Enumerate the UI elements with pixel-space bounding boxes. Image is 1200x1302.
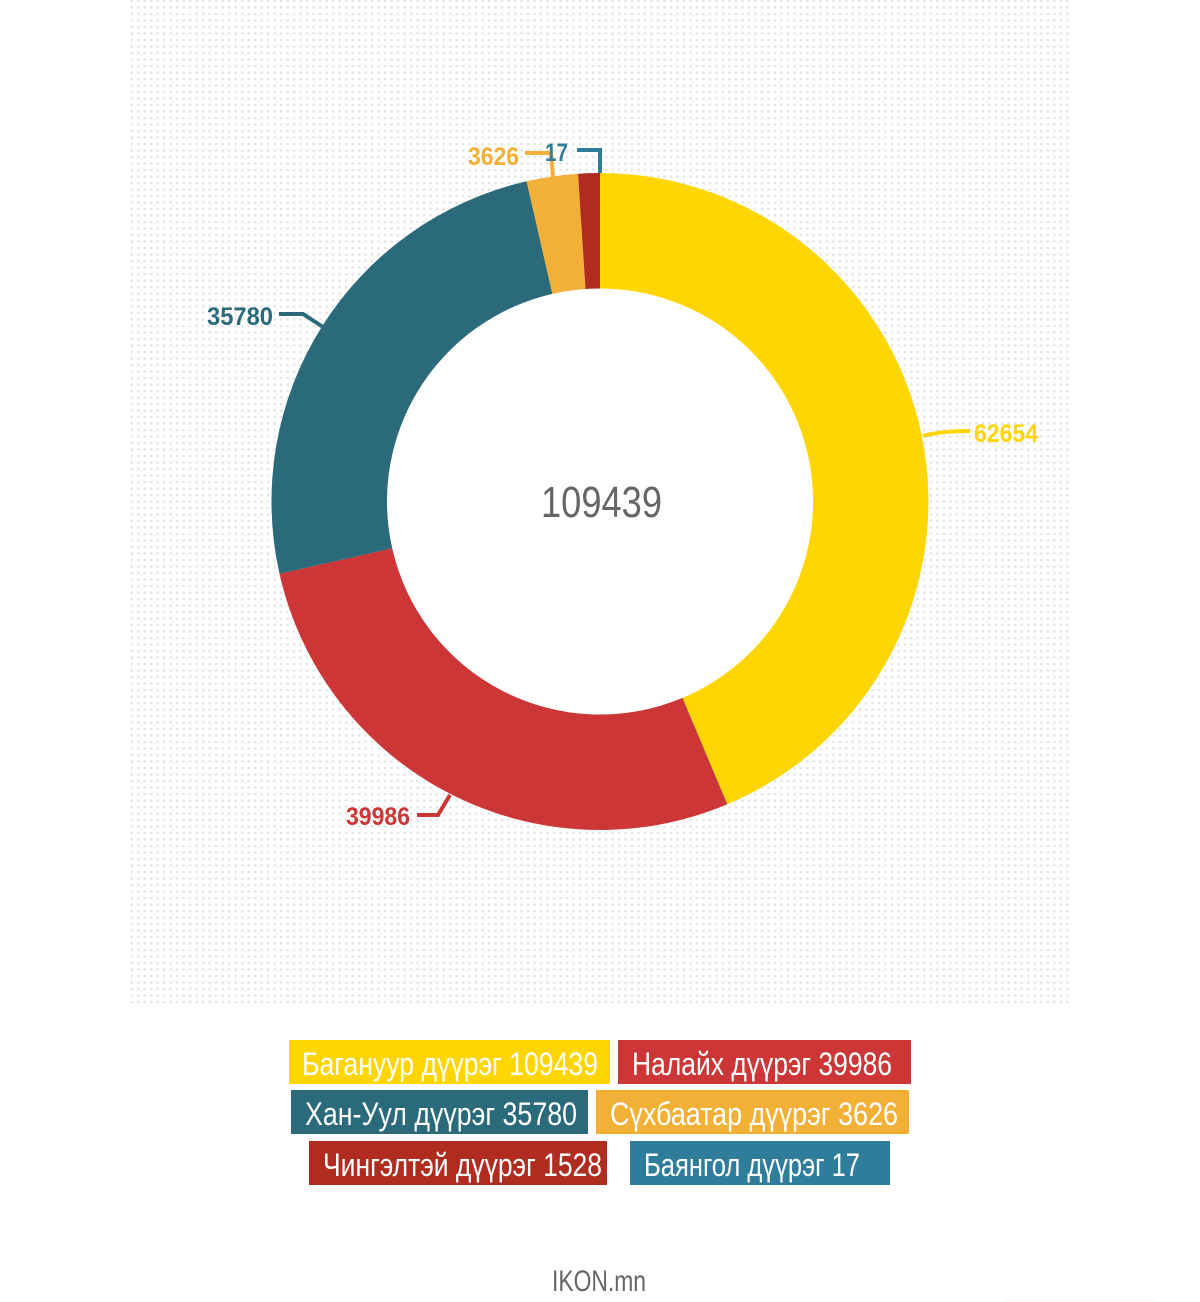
legend item: Чингэлтэй: Чингэлтэй дүүрэг 1528 bbox=[323, 1147, 602, 1183]
callout: 39986 bbox=[346, 795, 450, 831]
legend item: Багануур: Багануур дүүрэг 109439 bbox=[302, 1046, 598, 1082]
total value: 109439 bbox=[541, 478, 662, 527]
legend bbox=[289, 1040, 911, 1185]
legend item: Налайх: Налайх дүүрэг 39986 bbox=[632, 1046, 892, 1082]
callout: 35780: 35780 bbox=[207, 303, 273, 331]
legend item: Багануур bbox=[289, 1040, 610, 1084]
callout: 3626 bbox=[468, 143, 553, 177]
segment: Чингэлтэй 1528 bbox=[578, 173, 600, 289]
segment: Налайх 39986 bbox=[280, 548, 727, 830]
segment: Хан-Уул 35780 bbox=[271, 181, 552, 574]
legend item: Сүхбаатар: Сүхбаатар дүүрэг 3626 bbox=[610, 1096, 898, 1132]
panel: dotted background bbox=[129, 0, 1070, 1004]
callout: 39986: 39986 bbox=[346, 803, 410, 831]
legend item: Чингэлтэй bbox=[309, 1141, 607, 1185]
legend item: Хан-Уул: Хан-Уул дүүрэг 35780 bbox=[305, 1096, 577, 1132]
donut chart bbox=[271, 173, 928, 830]
callout: 17: 17 bbox=[545, 139, 568, 167]
inner circle bbox=[386, 288, 814, 716]
segment: Баганур 62654 bbox=[600, 173, 928, 804]
callout: 17 bbox=[545, 139, 600, 173]
callout: 3626: 3626 bbox=[468, 143, 519, 171]
callout: 35780 bbox=[207, 303, 323, 331]
footer: source: IKON.mn bbox=[552, 1265, 646, 1298]
callout: 62654 bbox=[923, 420, 1038, 448]
legend item: Баянгол: Баянгол дүүрэг 17 bbox=[644, 1147, 860, 1183]
callout: 62654: 62654 bbox=[974, 420, 1038, 448]
legend item: Хан-Уул bbox=[291, 1090, 588, 1134]
segment: Сүхбаатар 3626 bbox=[527, 174, 586, 294]
